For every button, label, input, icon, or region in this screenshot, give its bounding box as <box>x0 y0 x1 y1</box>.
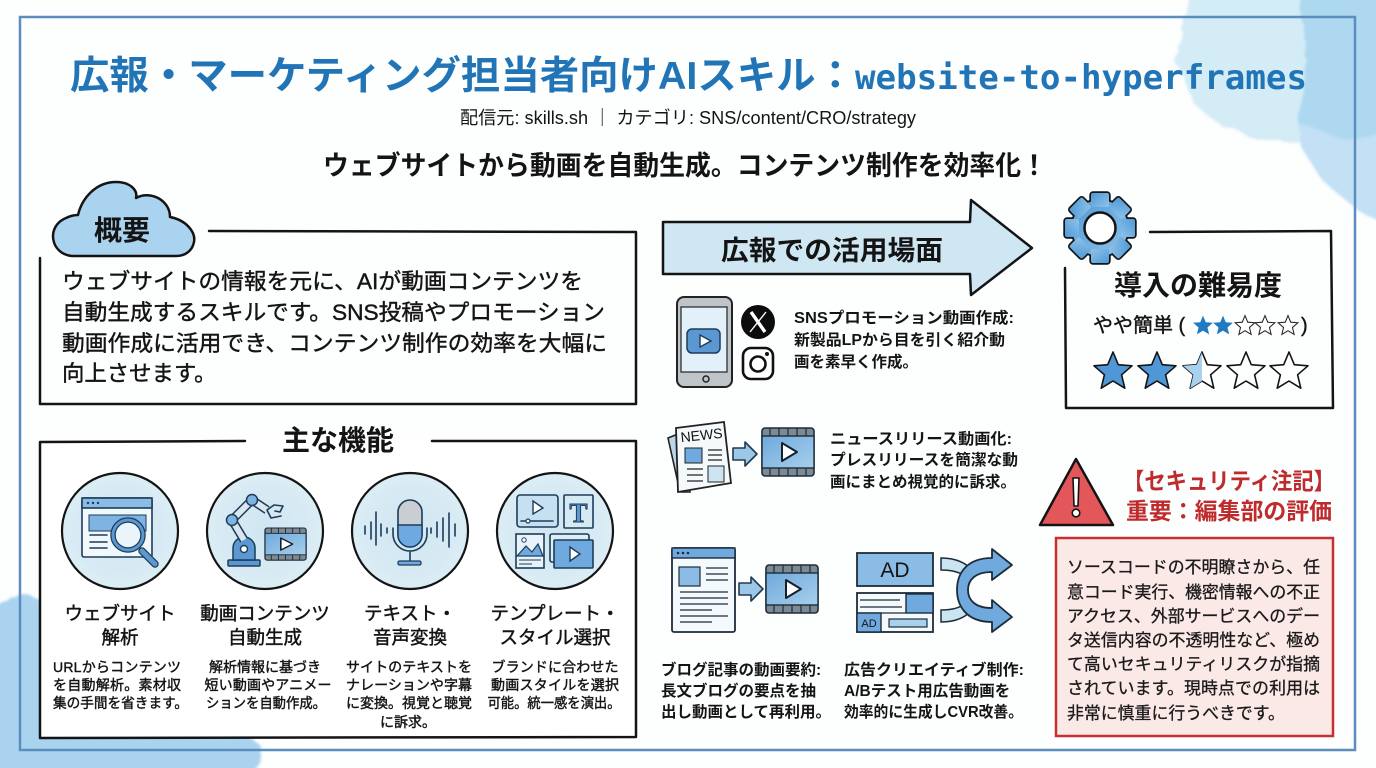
feature description: URLからコンテンツ <box>53 659 181 675</box>
icon: cloud <box>53 182 194 256</box>
feature description: ブランドに合わせた <box>492 659 618 675</box>
icon: robot arm and film <box>226 494 306 566</box>
icon: template tiles <box>516 495 593 568</box>
use case text: 画を素早く作成。 <box>794 352 918 371</box>
overview text <box>62 269 607 386</box>
difficulty box <box>1065 231 1333 408</box>
feature title: テキスト・ <box>364 603 456 624</box>
arrow heading: 広報での活用場面 <box>721 236 943 266</box>
security warning text: て高いセキュリティリスクが指摘 <box>1067 655 1320 674</box>
security heading: 重要：編集部の評価 <box>1126 498 1332 524</box>
panel: difficulty <box>1065 193 1333 408</box>
feature description: 解析情報に基づき <box>209 659 321 675</box>
use case: SNS promotion <box>677 297 1014 387</box>
use case text: ブログ記事の動画要約: <box>661 660 821 679</box>
icon: video film <box>762 428 814 476</box>
feature description: 可能。統一感を演出。 <box>488 695 620 711</box>
title: website-to-hyperframes <box>855 58 1307 98</box>
feature description: に訴求。 <box>380 714 436 730</box>
icon: smartphone <box>677 297 732 387</box>
icon: newspaper: NEWS <box>680 425 723 445</box>
arrow heading <box>663 200 1032 295</box>
difficulty rating text: やや簡単 ( <box>1093 314 1186 337</box>
feature: video generation: 自動生成 <box>228 627 302 648</box>
feature: text to speech <box>346 473 472 730</box>
use case text: ニュースリリース動画化: <box>830 430 1012 448</box>
feature description: 短い動画やアニメー <box>204 677 332 693</box>
use case text: 効率的に生成しCVR改善。 <box>844 702 1023 721</box>
icon: video film <box>766 565 818 613</box>
icon: newspaper <box>668 422 731 492</box>
overview box <box>40 231 636 404</box>
panel: main features <box>40 425 636 738</box>
use case: blog summary <box>661 548 831 721</box>
icon: gear <box>1065 193 1135 263</box>
security heading: 【セキュリティ注記】 <box>1123 468 1335 494</box>
use case text: 出し動画として再利用。 <box>661 703 831 721</box>
feature: website analysis <box>53 473 188 711</box>
icon: split arrows <box>941 549 1012 632</box>
security warning text <box>1067 558 1320 723</box>
security warning box <box>1056 538 1333 736</box>
security warning text: ソースコードの不明瞭さから、任 <box>1067 558 1320 577</box>
security warning text: 非常に慎重に行うべきです。 <box>1067 704 1285 723</box>
use case text <box>661 660 831 721</box>
icon: browser and magnifier <box>82 498 155 564</box>
use case text: プレスリリースを簡潔な動 <box>830 450 1018 469</box>
feature description <box>204 659 332 711</box>
feature description <box>53 659 188 711</box>
features heading: 主な機能 <box>282 425 394 456</box>
use case text: A/Bテスト用広告動画を <box>844 682 1010 700</box>
feature description: サイトのテキストを <box>346 659 472 675</box>
use case: news release <box>668 422 1018 492</box>
security warning text: 意コード実行、機密情報への不正 <box>1067 583 1320 602</box>
overview text: ウェブサイトの情報を元に、AIが動画コンテンツを <box>62 269 583 294</box>
security heading <box>1123 468 1335 524</box>
arrow <box>739 577 763 601</box>
security warning text: されています。現時点での利用は <box>1067 679 1320 698</box>
use case text: 長文ブログの要点を抽 <box>661 681 816 700</box>
feature: website analysis: 解析 <box>101 627 139 648</box>
title <box>70 55 1307 98</box>
panel: PR use cases <box>661 200 1032 721</box>
icon: Instagram logo <box>743 348 773 379</box>
icon: ad banners: AD <box>880 559 910 582</box>
feature title: テンプレート・ <box>491 603 619 624</box>
difficulty heading: 導入の難易度 <box>1114 270 1282 301</box>
use case text <box>794 308 1014 371</box>
feature description: ションを自動作成。 <box>206 695 326 711</box>
feature description: 集の手間を省きます。 <box>53 695 188 711</box>
subtitle: source and category: 配信元: skills.sh ｜ カテゴリ: SNS/content/CRO/strategy <box>460 108 916 128</box>
feature description: 動画スタイルを選択 <box>491 677 619 693</box>
panel: overview <box>40 182 636 404</box>
icon: ad banners <box>857 553 933 632</box>
icon: warning triangle <box>1040 459 1113 525</box>
arrow <box>733 442 757 466</box>
rating stars <box>1094 352 1308 388</box>
use case text <box>830 430 1018 491</box>
icon: ad banners: AD <box>861 618 877 630</box>
difficulty rating text <box>1093 314 1308 337</box>
use case: ad creative <box>844 549 1024 721</box>
icon: X logo <box>741 305 775 339</box>
feature description <box>488 659 620 711</box>
security warning text: タ送信内容の不透明性など、極め <box>1067 631 1320 650</box>
feature: text to speech: 音声変換 <box>373 627 447 648</box>
overview text: 自動生成するスキルです。SNS投稿やプロモーション <box>62 300 605 325</box>
feature description <box>346 659 472 730</box>
feature description: を自動解析。素材収 <box>53 677 181 693</box>
overview text: 動画作成に活用でき、コンテンツ制作の効率を大幅に <box>62 331 607 356</box>
features box <box>40 441 636 738</box>
feature description: ナレーションや字幕 <box>346 677 472 693</box>
use case text <box>844 660 1024 721</box>
icon: microphone <box>365 500 455 565</box>
feature title: ウェブサイト <box>64 603 176 624</box>
security warning text: アクセス、外部サービスへのデー <box>1067 606 1320 626</box>
panel: security note <box>1040 459 1335 736</box>
icon: blog page <box>672 548 735 632</box>
use case text: 画にまとめ視覚的に訴求。 <box>830 472 1016 491</box>
use case text: SNSプロモーション動画作成: <box>794 308 1014 327</box>
overview heading: 概要 <box>94 215 150 246</box>
feature description: に変換。視覚と聴覚 <box>346 695 472 711</box>
overview text: 向上させます。 <box>62 361 216 386</box>
use case text: 新製品LPから目を引く紹介動 <box>794 331 1005 349</box>
icon: template tiles: T <box>569 498 588 528</box>
feature: video generation <box>200 473 332 711</box>
title: 広報・マーケティング担当者向けAIスキル： <box>70 55 855 98</box>
tagline: ウェブサイトから動画を自動生成。コンテンツ制作を効率化！ <box>323 150 1047 181</box>
feature: templates and style <box>488 473 620 711</box>
feature: templates and style: スタイル選択 <box>499 627 611 648</box>
use case text: 広告クリエイティブ制作: <box>844 660 1024 679</box>
feature title: 動画コンテンツ <box>200 603 330 624</box>
difficulty rating text: ) <box>1301 315 1308 337</box>
